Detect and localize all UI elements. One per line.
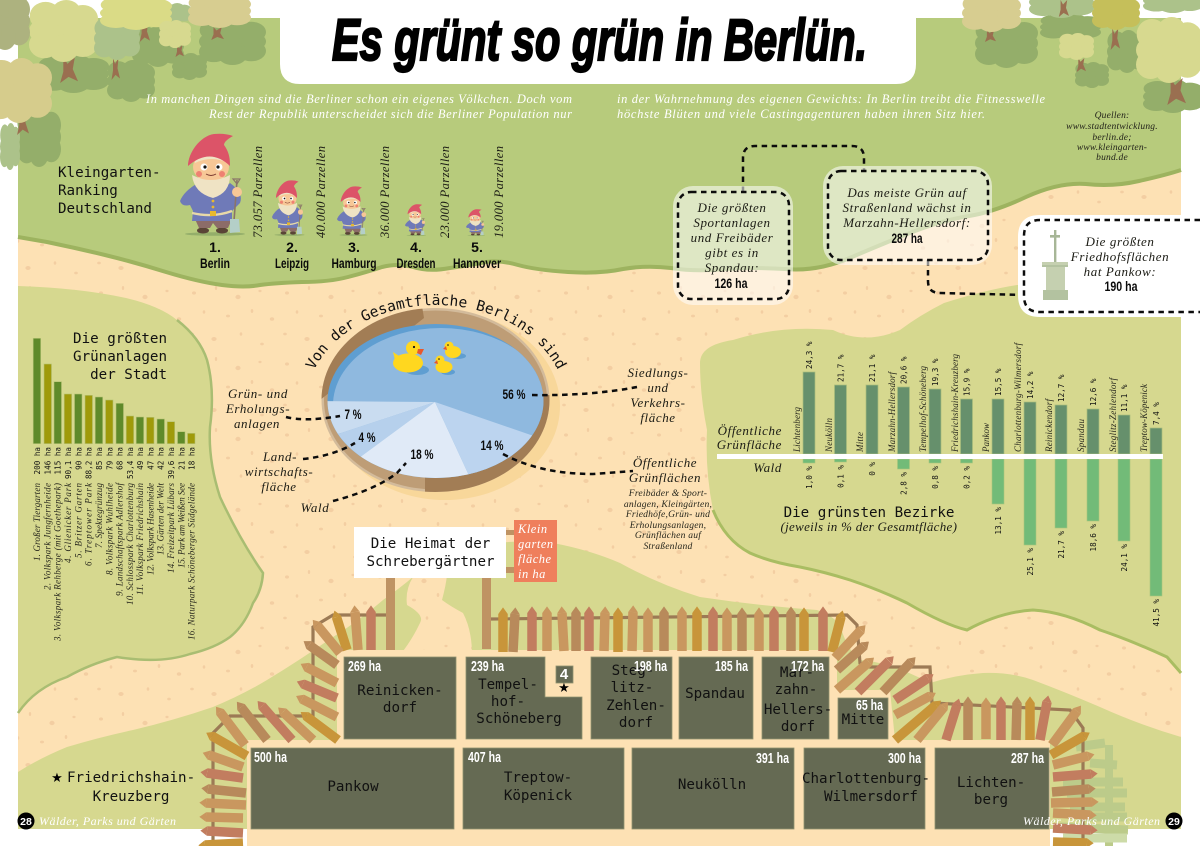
plot names: Lichten-: [957, 775, 1025, 791]
park names: [32, 482, 196, 642]
park names: 5. Britzer Garten: [73, 482, 83, 558]
icon: gnome Hannover: [466, 209, 485, 236]
top values: 12,6 %: [1089, 378, 1098, 406]
bar values: 146 ha: [44, 447, 53, 474]
label: Landwirtschaftsfläche: Land-: [262, 449, 297, 464]
plot names: dorf: [781, 719, 815, 735]
top values: [805, 341, 1161, 425]
label: Grün- und Erholungsanlagen: [225, 386, 290, 431]
text block: sources: [1066, 111, 1158, 163]
plot areas: 198 ha: [634, 658, 667, 675]
legend: Kleingartenfläche: Klein: [517, 522, 548, 536]
plot: Spandau: [679, 657, 753, 739]
plot areas: 300 ha: [888, 750, 921, 767]
district names: Charlottenburg-Wilmersdorf: [1013, 342, 1023, 452]
top values: 21,7 %: [836, 354, 846, 382]
plot names: dorf: [619, 715, 653, 731]
plot: Charlottenburg-Wilmersdorf: [804, 748, 925, 829]
plot areas: 391 ha: [756, 750, 789, 767]
district names: Spandau: [1076, 418, 1086, 452]
panel: greenest districts: [717, 341, 1163, 626]
icon: trees top right: [962, 0, 1200, 113]
bottom values: 24,1 %: [1120, 544, 1129, 571]
legend: Kleingartenfläche: garten: [518, 537, 554, 551]
plot areas: 239 ha: [471, 658, 504, 675]
bottom values: 1,0 %: [805, 466, 814, 489]
plot areas: 172 ha: [791, 658, 824, 675]
district names: Neukölln: [824, 418, 834, 453]
bottom values: 18,6 %: [1089, 524, 1098, 551]
plot areas: 500 ha: [254, 749, 287, 766]
district names: Tempelhof-Schöneberg: [918, 366, 928, 452]
heading: Die größten Grünanlagen: [73, 331, 167, 383]
rank labels: 4.: [410, 239, 422, 255]
plot names: Pankow: [327, 779, 379, 795]
plot names: Charlottenburg-: [802, 771, 930, 787]
label: Öffentliche Grünflächen: Freibäder & Sport-: [628, 488, 707, 499]
park names: 12. Volkspark Hasenheide: [145, 483, 155, 575]
callout: Pankow cemetery: hat Pankow:: [1084, 264, 1156, 279]
top values: 21,1 %: [868, 354, 877, 382]
park names: 3. Volkspark Rehberge (mit Goethepark): [53, 483, 63, 642]
bottom values: 25,1 %: [1026, 548, 1035, 575]
park names: 10. Schlosspark Charlottenburg: [125, 482, 135, 605]
plot names: Zehlen-: [606, 698, 666, 714]
sign: Die Heimat der Schrebergärtner: Die Heimat der: [371, 536, 490, 552]
plot areas: 185 ha: [715, 658, 748, 675]
rank labels: [200, 239, 501, 271]
icon: gnome Leipzig: [272, 180, 304, 236]
bottom values: 0 %: [868, 462, 877, 476]
plot counts: 73.057 Parzellen: [251, 146, 265, 238]
callout: Spandau: Spandau:: [705, 260, 759, 275]
plot names: Mar-: [780, 665, 814, 681]
icon: gnome Berlin: [180, 134, 245, 236]
icon: small duck one: [443, 342, 466, 359]
heading: Kleingarten-Ranking: Kleingarten-: [58, 165, 160, 181]
plot areas: 65 ha: [856, 697, 883, 714]
plot: Lichtenberg: [935, 748, 1049, 829]
top values: 15,9 %: [962, 368, 972, 396]
text block: sources: berlin.de;: [1092, 133, 1132, 143]
slice: 18 %: [360, 402, 468, 478]
text block: intro right: höchste Blüten und viele Castingagenturen haben ihren Sitz hier.: [617, 107, 985, 121]
pie percentage labels: 14 %: [480, 437, 504, 453]
sign: Die Heimat der Schrebergärtner: [354, 527, 506, 578]
park names: 8. Volkspark Wuhlheide: [104, 483, 114, 575]
plot names: Hellers-: [764, 702, 832, 718]
plot names: hof-: [491, 694, 525, 710]
district names: Pankow: [981, 423, 991, 453]
plot: Reinickendorf: [344, 657, 456, 739]
park names: 2. Volkspark Jungfernheide: [43, 483, 53, 590]
bar values: 53,4 ha: [126, 447, 135, 479]
rank labels: Hannover: [453, 255, 501, 271]
bar chart: parks: [33, 338, 195, 444]
district names: Treptow-Köpenick: [1139, 383, 1149, 452]
plot names: zahn-: [775, 682, 817, 698]
axis labels: Wald: [753, 460, 782, 475]
rank labels: 1.: [209, 239, 221, 255]
top values: 7,4 %: [1152, 402, 1161, 425]
label: Öffentliche Grünflächen: Öffentliche: [633, 455, 697, 470]
bar values: 88,2 ha: [85, 447, 94, 479]
icon: gravestone cross: [1042, 230, 1068, 300]
heading: Kleingarten-Ranking: Ranking: [58, 183, 118, 199]
pie percentage labels: [344, 386, 526, 462]
top values: 20,6 %: [900, 356, 908, 384]
heading: Die grünsten Bezirke: Die grünsten Bezirke: [784, 505, 954, 521]
panel: Kleingarten ranking: [58, 134, 506, 271]
plot names: dorf: [383, 700, 417, 716]
rank labels: 2.: [286, 239, 298, 255]
pie chart: paddling pool: [310, 306, 560, 500]
axis labels: Öffentliche: [718, 423, 782, 438]
bottom values: [805, 462, 1161, 626]
plot: Tempelhof-Schöneberg: [466, 657, 582, 739]
callout: Marzahn-Hellersdorf: Marzahn-Hellersdorf:: [842, 215, 971, 230]
icon: small duck two: [434, 356, 455, 375]
pie percentage labels: 4 %: [358, 429, 376, 445]
park names: 1. Großer Tiergarten: [32, 482, 42, 561]
panel: top green meadow: [18, 18, 1181, 286]
district names: [792, 342, 1149, 453]
heading: Die größten Grünanlagen: der Stadt: [90, 367, 167, 383]
bar values: 90 ha: [74, 447, 83, 470]
icon: star: ★: [558, 681, 570, 696]
slice: 14 %: [435, 402, 532, 474]
panel: lower garden meadow: [18, 542, 1181, 829]
park names: 15. Park am Weißen See: [176, 483, 186, 568]
top values: 11,1 %: [1120, 384, 1129, 412]
heading: Die grünsten Bezirke: (jeweils in % der Gesamtfläche): [780, 519, 958, 534]
plot areas: 4: [560, 666, 569, 683]
rank labels: Dresden: [396, 255, 436, 271]
text block: sources: Quellen:: [1095, 111, 1129, 121]
footer: page 28: Wälder, Parks und Gärten: [39, 814, 176, 828]
label: Öffentliche Grünflächen: Friedhöfe,Grün- und: [625, 509, 710, 520]
label: Öffentliche Grünflächen: Grünflächen: [629, 470, 701, 485]
heading: pool arc title: Von der Gesamtfläche Berlins sind: [304, 294, 567, 369]
callout: Pankow cemetery: 190 ha: [1104, 278, 1138, 294]
bar values: 49 ha: [136, 447, 145, 470]
plot: Neukölln: [632, 748, 794, 829]
plot names: Spandau: [685, 686, 745, 702]
footer: page 29: 29: [1168, 816, 1180, 828]
legend: Kleingartenfläche: fläche: [518, 552, 552, 566]
callout: Spandau: gibt es in: [705, 245, 759, 260]
label: Öffentliche Grünflächen: Straßenland: [643, 541, 693, 552]
park names: 16. Naturpark Schöneberger Südgelände: [186, 483, 196, 640]
panel: largest green spaces: [32, 331, 196, 642]
callout: Marzahn-Hellersdorf: 287 ha: [892, 230, 923, 246]
label: Öffentliche Grünflächen: [624, 455, 712, 552]
park names: 14. Freizeitpark Lübars: [166, 483, 176, 573]
panel: right light green area: [700, 270, 1181, 673]
plot names: Köpenick: [504, 788, 573, 804]
district names: Mitte: [855, 432, 865, 453]
panel: garden sand path: [247, 650, 1050, 846]
bar values: 39,6 ha: [167, 447, 176, 479]
plot counts: 23.000 Parzellen: [438, 146, 452, 238]
callout: Spandau: [673, 186, 793, 305]
plot areas: [254, 658, 1044, 767]
axis labels: Grünfläche: [717, 437, 782, 452]
bar values: 115 ha: [54, 447, 63, 474]
bar values: 79 ha: [105, 447, 114, 470]
plot names: berg: [974, 792, 1008, 808]
bar values: 18 ha: [187, 447, 196, 470]
park names: 4. Glienicker Park: [63, 482, 73, 563]
panel: garden plots: [251, 657, 1049, 829]
park names: 11. Volkspark Friedrichshain: [135, 482, 145, 595]
bar values: 85 ha: [95, 447, 104, 470]
plot: Treptow-Köpenick: [463, 748, 624, 829]
district names: Marzahn-Hellersdorf: [887, 371, 897, 453]
bars: forest: [803, 459, 1162, 596]
label: Friedrichshain-Kreuzberg: Kreuzberg: [93, 789, 169, 805]
axis labels: [717, 423, 782, 475]
legend: Kleingartenfläche: [514, 520, 557, 582]
bar values: 21 ha: [177, 447, 186, 470]
label: Siedlungs- und Verkehrsfläche: fläche: [640, 410, 676, 425]
plot names: Treptow-: [504, 770, 572, 786]
callout: Spandau: Die größten: [696, 200, 767, 215]
label: Grün- und Erholungsanlagen: Grün- und: [228, 386, 288, 401]
bottom values: 2,8 %: [900, 472, 908, 495]
rank labels: Hamburg: [332, 255, 376, 271]
sign posts: [386, 530, 514, 650]
rank labels: 3.: [348, 239, 360, 255]
label: Siedlungs- und Verkehrsfläche: und: [647, 380, 669, 395]
label: Siedlungs- und Verkehrsfläche: Verkehrs-: [630, 395, 686, 410]
text block: intro left: Rest der Republik unterscheidet sich die Berliner Population nur: [208, 107, 572, 121]
bottom values: 13,1 %: [994, 507, 1003, 534]
label: Öffentliche Grünflächen: Erholungsanlagen,: [629, 520, 706, 531]
plot names: Reinicken-: [357, 683, 443, 699]
plot areas: 287 ha: [1011, 750, 1044, 767]
bar values: 68 ha: [116, 447, 125, 470]
plot: Friedrichshain-Kreuzberg: [556, 666, 573, 683]
top values: 15,5 %: [994, 368, 1003, 396]
pie percentage labels: 7 %: [344, 406, 362, 422]
plot names: Steg-: [612, 663, 654, 679]
pie percentage labels: 18 %: [410, 446, 434, 462]
plot: Marzahn-Hellersdorf: [762, 657, 829, 739]
callout: Pankow cemetery: Friedhofsflächen: [1070, 249, 1169, 264]
text block: sources: www.stadtentwicklung.: [1066, 122, 1158, 132]
bar values: 42 ha: [157, 447, 166, 470]
label: Öffentliche Grünflächen: Grünflächen auf: [635, 530, 702, 541]
park names: 9. Landschaftspark Adlershof: [115, 482, 125, 596]
panel: left light green area: [18, 286, 263, 713]
plot: Pankow: [251, 748, 454, 829]
district names: Friedrichshain-Kreuzberg: [950, 354, 960, 453]
label: Wald: Wald: [301, 500, 329, 515]
callout: Marzahn-Hellersdorf: [823, 166, 992, 265]
plot names: Schöneberg: [476, 711, 562, 727]
top values: 14,2 %: [1026, 371, 1035, 399]
callout: Spandau: Sportanlagen: [693, 215, 771, 230]
slice: 4 %: [338, 402, 434, 456]
callout: Marzahn-Hellersdorf: Das meiste Grün auf: [846, 185, 968, 200]
park names: 6. Treptower Park: [84, 482, 94, 566]
rank labels: Berlin: [200, 255, 230, 271]
label: Friedrichshain-Kreuzberg: Friedrichshain-: [67, 770, 195, 786]
label: Siedlungs- und Verkehrsfläche: [628, 365, 688, 425]
callout: Pankow cemetery: [1018, 215, 1200, 317]
legend: Kleingartenfläche: in ha: [518, 567, 546, 581]
bar values: 90,1 ha: [64, 447, 73, 479]
bottom values: 21,7 %: [1057, 531, 1066, 558]
text block: sources: www.kleingarten-: [1077, 143, 1147, 153]
top values: 24,3 %: [805, 341, 814, 369]
label: Grün- und Erholungsanlagen: Erholungs-: [225, 401, 290, 416]
callout: Marzahn-Hellersdorf: Straßenland wächst in: [843, 200, 971, 215]
icon: trees top left: [0, 0, 266, 170]
icon: gnome Hamburg: [337, 186, 368, 236]
sign: Die Heimat der Schrebergärtner: Schrebergärtner: [366, 554, 495, 570]
arrow: connector Spandau to Straßenland: [743, 146, 864, 192]
plot names: Tempel-: [478, 677, 538, 693]
arrow: connector Straßenland to Friedhof: [928, 260, 1024, 295]
heading: Kleingarten-Ranking: Deutschland: [58, 201, 152, 217]
text block: intro left: [145, 92, 572, 121]
rank labels: 5.: [471, 239, 483, 255]
plot areas: 407 ha: [468, 749, 501, 766]
park names: 13. Gärten der Welt: [156, 483, 166, 555]
district names: Steglitz-Zehlendorf: [1108, 377, 1118, 452]
icon: big duck: [393, 341, 429, 375]
bar values: [33, 447, 196, 479]
label: Landwirtschaftsfläche: fläche: [261, 479, 297, 494]
plot areas: 269 ha: [348, 658, 381, 675]
heading: Die größten Grünanlagen: Grünanlagen: [73, 349, 167, 365]
callout: Spandau: 126 ha: [714, 275, 748, 291]
plot names: Mitte: [842, 712, 884, 728]
label: Friedrichshain-Kreuzberg: [51, 770, 195, 805]
icon: fir tree: [1060, 743, 1128, 846]
plot counts: 40.000 Parzellen: [314, 146, 328, 238]
top values: 12,7 %: [1057, 374, 1066, 402]
plot names: Wilmersdorf: [824, 789, 918, 805]
fence: [205, 612, 1092, 846]
text block: intro right: [617, 92, 1045, 121]
text block: intro left: In manchen Dingen sind die Berliner schon ein eigenes Völkchen. Doch vom: [145, 92, 572, 106]
plot: Steglitz-Zehlendorf: [591, 657, 672, 739]
title plate: [280, 0, 916, 84]
title: Es grünt so grün in Berlün.: [332, 8, 867, 73]
bottom values: 0,2 %: [962, 466, 972, 489]
plot counts: 36.000 Parzellen: [378, 146, 392, 239]
heading: Die grünsten Bezirke: [780, 505, 958, 534]
top values: 19,3 %: [931, 358, 940, 386]
label: Friedrichshain-Kreuzberg: ★: [51, 771, 63, 786]
bottom values: 41,5 %: [1152, 599, 1161, 626]
bar values: 200 ha: [33, 447, 42, 474]
plot names: Neukölln: [678, 777, 746, 793]
label: Grün- und Erholungsanlagen: anlagen: [234, 416, 280, 431]
label: Öffentliche Grünflächen: anlagen, Kleingärten,: [624, 499, 712, 510]
label: Landwirtschaftsfläche: [245, 449, 313, 494]
icon: gnome Dresden: [405, 204, 426, 236]
bottom values: 0,1 %: [836, 465, 846, 488]
plot counts: 19.000 Parzellen: [492, 146, 506, 238]
plot: Mitte: [838, 698, 888, 739]
district names: Reinickendorf: [1044, 398, 1054, 453]
rank labels: Leipzig: [275, 255, 309, 271]
plot names: litz-: [611, 680, 653, 696]
label: Siedlungs- und Verkehrsfläche: Siedlungs-: [628, 365, 688, 380]
district names: Lichtenberg: [792, 406, 802, 453]
footer: page 28: 28: [20, 816, 32, 828]
text block: intro right: in der Wahrnehmung des eigenen Gewichts: In Berlin treibt die Fitnesswelle: [617, 92, 1045, 106]
footer: page 29: Wälder, Parks und Gärten: [1023, 814, 1160, 828]
pie percentage labels: 56 %: [502, 386, 526, 402]
bottom values: 0,8 %: [931, 466, 940, 489]
park names: 7. Spektegrünzug: [94, 482, 104, 548]
label: Landwirtschaftsfläche: wirtschafts-: [245, 464, 313, 479]
heading: Kleingarten-Ranking: [58, 165, 160, 217]
callout: Spandau: und Freibäder: [691, 230, 774, 245]
bars: public green space: [803, 372, 1162, 454]
slice: 7 %: [328, 401, 434, 434]
bar values: 47 ha: [146, 447, 155, 470]
heading: Die größten Grünanlagen: Die größten: [73, 331, 167, 347]
leader lines: [286, 387, 637, 501]
text block: sources: bund.de: [1096, 153, 1128, 163]
plot names: [327, 663, 1025, 808]
plot counts: [251, 146, 506, 239]
callout: Pankow cemetery: Die größten: [1084, 234, 1155, 249]
